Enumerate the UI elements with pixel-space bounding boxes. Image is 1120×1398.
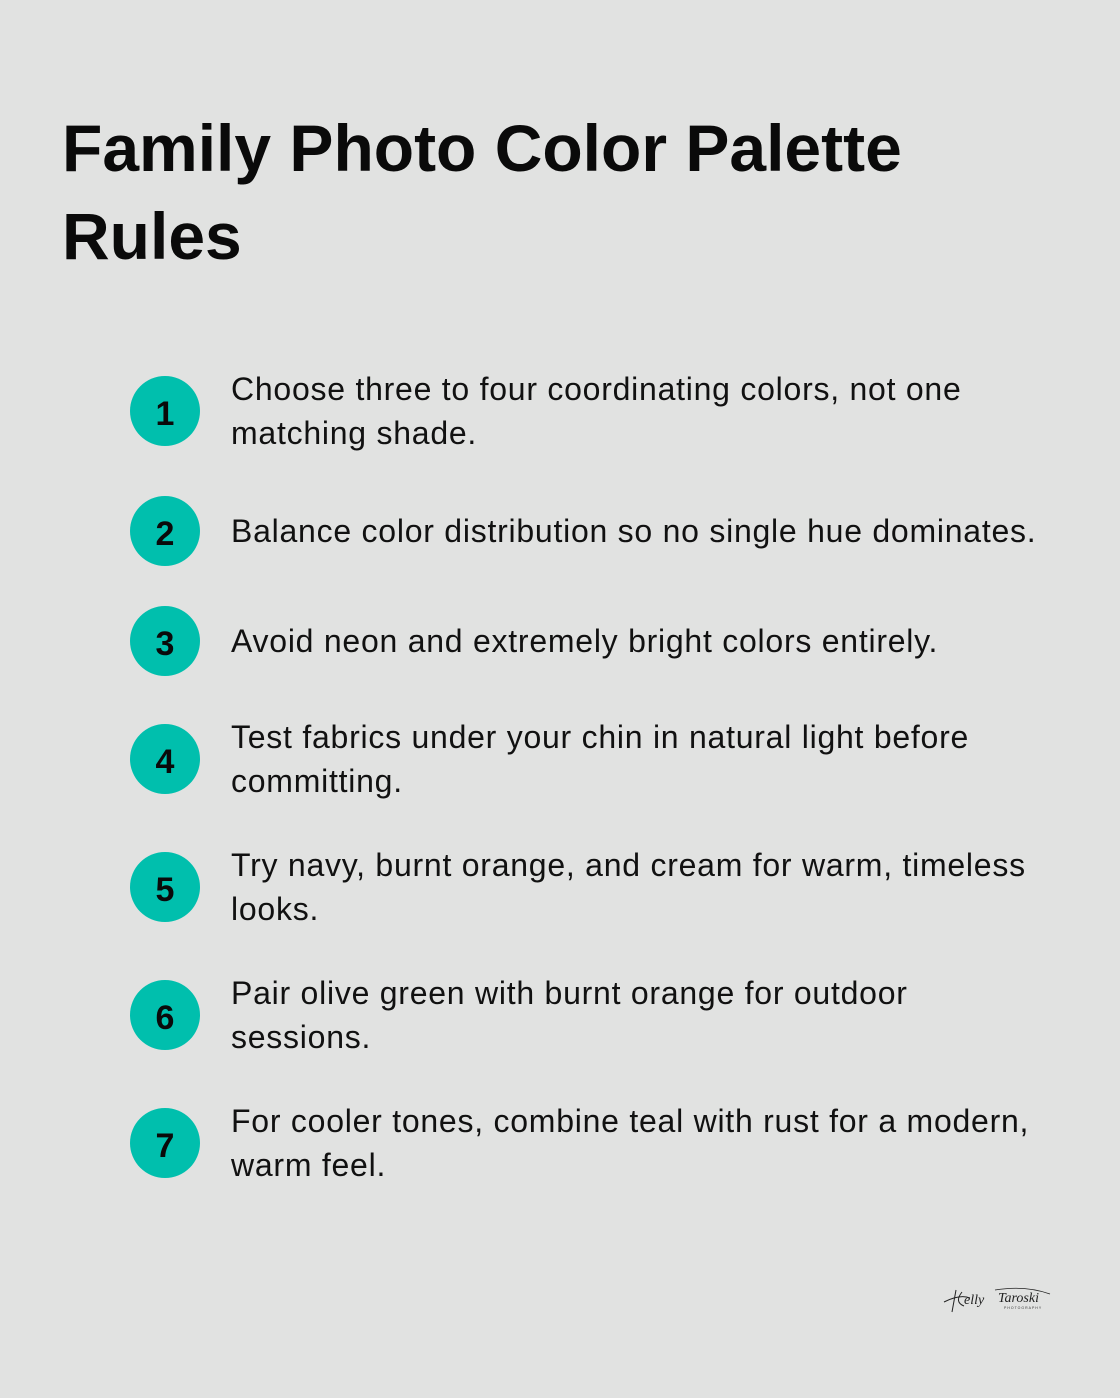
item 7 xyxy=(130,1103,1029,1183)
item 2: 2 xyxy=(156,515,174,553)
item 7: 7 xyxy=(156,1127,174,1165)
item 6 xyxy=(130,975,908,1055)
item 7: warm feel. xyxy=(231,1147,386,1183)
item 4: committing. xyxy=(231,763,403,799)
item 4: Test fabrics under your chin in natural light before xyxy=(231,719,969,755)
item 6: Pair olive green with burnt orange for outdoor xyxy=(231,975,908,1011)
item 1: matching shade. xyxy=(231,415,477,451)
title xyxy=(62,111,902,273)
item 3: Avoid neon and extremely bright colors entirely. xyxy=(231,623,938,659)
item 1 xyxy=(130,371,962,451)
item 3: 3 xyxy=(156,625,174,663)
item 6: 6 xyxy=(156,999,174,1037)
item 2 xyxy=(130,496,1036,566)
item 5: looks. xyxy=(231,891,319,927)
item 4 xyxy=(130,719,969,799)
title: Family Photo Color Palette xyxy=(62,111,902,185)
item 6: sessions. xyxy=(231,1019,371,1055)
item 7: For cooler tones, combine teal with rust for a modern, xyxy=(231,1103,1029,1139)
logo signature xyxy=(944,1288,1050,1312)
item 1: Choose three to four coordinating colors, not one xyxy=(231,371,962,407)
logo signature: elly xyxy=(964,1293,985,1308)
item 4: 4 xyxy=(156,743,174,781)
item 1: 1 xyxy=(156,395,174,433)
item 5: 5 xyxy=(156,871,174,909)
logo signature: Taroski xyxy=(998,1291,1039,1306)
item 5: Try navy, burnt orange, and cream for warm, timeless xyxy=(231,847,1026,883)
logo signature: PHOTOGRAPHY xyxy=(1004,1306,1042,1310)
item 2: Balance color distribution so no single hue dominates. xyxy=(231,513,1036,549)
item 5 xyxy=(130,847,1026,927)
title: Rules xyxy=(62,199,242,273)
item 3 xyxy=(130,606,938,676)
